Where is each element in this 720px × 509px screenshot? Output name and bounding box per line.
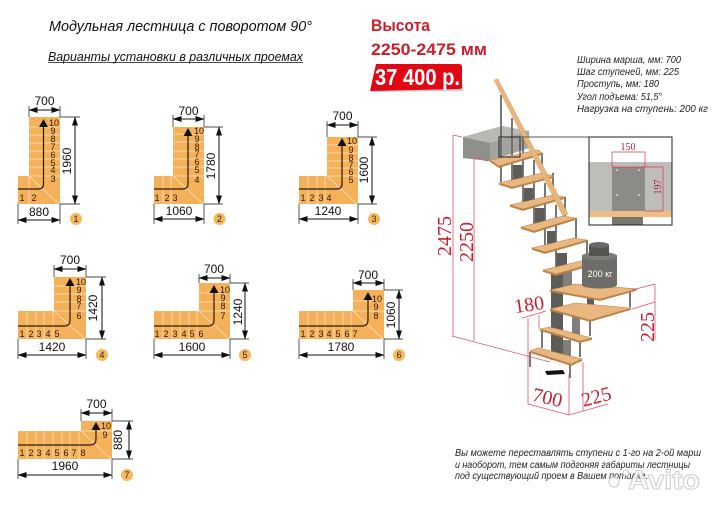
- plan 6: 1780: [328, 340, 355, 354]
- plan 2: 1780: [204, 152, 218, 179]
- plan 7: 7: [124, 470, 130, 480]
- specifications: Проступь, мм: 180: [577, 79, 659, 90]
- plan 7: 880: [111, 430, 125, 450]
- plan 3: 9: [348, 145, 354, 155]
- plan 1: 6: [50, 150, 56, 160]
- plan 7: 5: [54, 448, 60, 458]
- plan 1: 1: [73, 214, 79, 224]
- note text: [455, 448, 702, 482]
- plan 1: 7: [50, 142, 56, 152]
- plan 4: 2: [28, 329, 34, 339]
- note text: под существующий проем в Вашем потолке.: [455, 471, 648, 482]
- plan 4: 1420: [39, 340, 66, 354]
- plan 3: 3: [318, 193, 324, 203]
- tread and rise dimensions: 225: [637, 312, 659, 342]
- plan 5: 4: [181, 329, 187, 339]
- plan 6: 4: [326, 329, 332, 339]
- plan 4: 1: [19, 329, 25, 339]
- staircase illustration: [463, 79, 638, 378]
- plan 3: 1: [300, 193, 306, 203]
- tread and rise dimensions: [513, 284, 659, 415]
- plan 7: 1960: [52, 459, 79, 473]
- plan 3: 5: [348, 175, 354, 185]
- plan 1: 4: [50, 165, 56, 175]
- plan 5: 3: [172, 329, 178, 339]
- plan 3: 8: [348, 153, 354, 163]
- plan 5: 5: [189, 329, 195, 339]
- plan 6: 1: [300, 329, 306, 339]
- plan 1: 10: [49, 118, 59, 128]
- tread and rise dimensions: 180: [513, 292, 546, 318]
- plan 6: 3: [318, 329, 324, 339]
- plan 2: 1060: [166, 204, 193, 218]
- plan 7: 1: [19, 448, 25, 458]
- plan 4: 8: [76, 294, 82, 304]
- plan 2: 8: [194, 142, 200, 152]
- plan 3: 3: [371, 214, 377, 224]
- height heading: Высота: [371, 16, 430, 35]
- plan 5: 10: [220, 285, 230, 295]
- plan 2: 5: [194, 165, 200, 175]
- plan 1: 2: [31, 193, 37, 203]
- plan 6: 2: [309, 329, 315, 339]
- plan 7: 9: [102, 430, 108, 440]
- plan 1: 700: [34, 94, 55, 108]
- plan 5: 700: [204, 262, 224, 276]
- height dimension lines: [434, 135, 550, 362]
- plan 3: 4: [326, 193, 332, 203]
- specifications: [576, 55, 708, 115]
- height heading: [371, 16, 487, 59]
- plan 2: 9: [194, 134, 200, 144]
- plan 5: 6: [198, 329, 204, 339]
- plan 2: 3: [172, 193, 178, 203]
- plan 4: 5: [54, 329, 60, 339]
- plan 5: 5: [242, 350, 248, 360]
- handrail: [494, 79, 568, 216]
- plan 5: 1600: [179, 340, 206, 354]
- plan 2: 1: [154, 193, 160, 203]
- note text: Вы можете переставлять ступени с 1-го на 2-ой марш: [455, 448, 702, 459]
- plan 2: 4: [194, 175, 200, 185]
- plan 3: 6: [348, 167, 354, 177]
- plan 5: 1240: [231, 298, 245, 325]
- plan 6: 6: [344, 329, 350, 339]
- plan 1: 1960: [60, 147, 74, 174]
- concrete landing block: [463, 126, 529, 161]
- plan 5: 7: [220, 311, 226, 321]
- plan 4: 7: [76, 301, 82, 311]
- central stringer: [513, 165, 594, 360]
- plan 6: 700: [358, 268, 378, 282]
- plan 4: 700: [60, 253, 80, 267]
- plan 7: 3: [36, 448, 42, 458]
- height heading: 2250-2475 мм: [371, 40, 487, 59]
- plan 7: 7: [71, 448, 77, 458]
- plan 7: 700: [86, 397, 107, 411]
- subtitle: Варианты установки в различных проемах: [48, 49, 303, 64]
- price tag: 37 400 р.: [375, 64, 460, 90]
- plan 6: 7: [352, 329, 358, 339]
- plan 5: 1: [154, 329, 160, 339]
- inset: mounting plate detail: 150: [620, 142, 636, 153]
- plan 6: 6: [396, 350, 402, 360]
- plan 4: [18, 253, 108, 361]
- plan 1: 880: [29, 205, 49, 219]
- plan 2: 7: [194, 149, 200, 159]
- base plate: [545, 370, 565, 375]
- plan 2: [154, 104, 226, 225]
- plan 7: 6: [63, 448, 69, 458]
- plan 7: 8: [80, 448, 86, 458]
- title: Модульная лестница с поворотом 90°: [49, 19, 312, 35]
- tread and rise dimensions: 700: [530, 384, 564, 412]
- plan 6: 1060: [384, 301, 398, 328]
- plan 2: 10: [194, 126, 204, 136]
- tread and rise dimensions: 225: [579, 383, 614, 412]
- plan 6: 10: [372, 294, 382, 304]
- plan 5: 2: [163, 329, 169, 339]
- plan 7: [18, 397, 133, 481]
- plan 1: [18, 94, 82, 225]
- plan 4: 9: [76, 285, 82, 295]
- weight: 200 кг: [588, 269, 613, 279]
- plan 4: 3: [36, 329, 42, 339]
- plan 3: 2: [309, 193, 315, 203]
- plan 5: 8: [220, 301, 226, 311]
- plan 7: 4: [45, 448, 51, 458]
- plan 3: 1600: [357, 156, 371, 183]
- height dimension lines: 2475: [434, 216, 456, 256]
- note text: и наоборот, тем самым подгоняя габариты лестницы: [455, 459, 691, 471]
- specifications: Шаг ступеней, мм: 225: [577, 67, 679, 78]
- treads: [490, 150, 638, 365]
- plan 1: 1: [19, 193, 25, 203]
- plan 7: 2: [28, 448, 34, 458]
- plan 5: 9: [220, 293, 226, 303]
- plan 6: 8: [373, 311, 379, 321]
- plan 2: 2: [217, 214, 222, 224]
- plan 3: 1240: [315, 204, 342, 218]
- plan 4: 4: [45, 329, 51, 339]
- balusters: [501, 95, 630, 378]
- inset: mounting plate detail: 197: [653, 180, 664, 194]
- plan 2: 2: [164, 193, 170, 203]
- plan 3: 10: [347, 136, 357, 146]
- height dimension lines: 2250: [456, 222, 478, 262]
- plan 4: 10: [76, 277, 86, 287]
- plan 6: [299, 268, 405, 361]
- plan 3: 7: [348, 160, 354, 170]
- inset: mounting plate detail: [499, 137, 672, 225]
- plan 7: 10: [101, 421, 111, 431]
- plan 1: 5: [50, 158, 56, 168]
- plan 2: 700: [178, 104, 199, 118]
- plan 1: 3: [50, 174, 56, 184]
- plan 1: 9: [50, 126, 56, 136]
- plan 4: 4: [99, 350, 105, 360]
- plan 3: 700: [332, 109, 353, 123]
- plan 6: 9: [373, 302, 379, 312]
- plan 4: 1420: [86, 294, 100, 321]
- specifications: Нагрузка на ступень: 200 кг: [577, 104, 708, 115]
- plan 2: 6: [194, 157, 200, 167]
- specifications: Ширина марша, мм: 700: [577, 55, 681, 66]
- specifications: Угол подъема: 51,5°: [576, 92, 662, 103]
- plan 3: [299, 109, 380, 225]
- weight: [582, 242, 617, 288]
- plan 6: 5: [335, 329, 341, 339]
- plan 1: 8: [50, 134, 56, 144]
- plan 5: [154, 262, 251, 361]
- plan 4: 6: [76, 311, 82, 321]
- watermark: Avito: [628, 465, 700, 495]
